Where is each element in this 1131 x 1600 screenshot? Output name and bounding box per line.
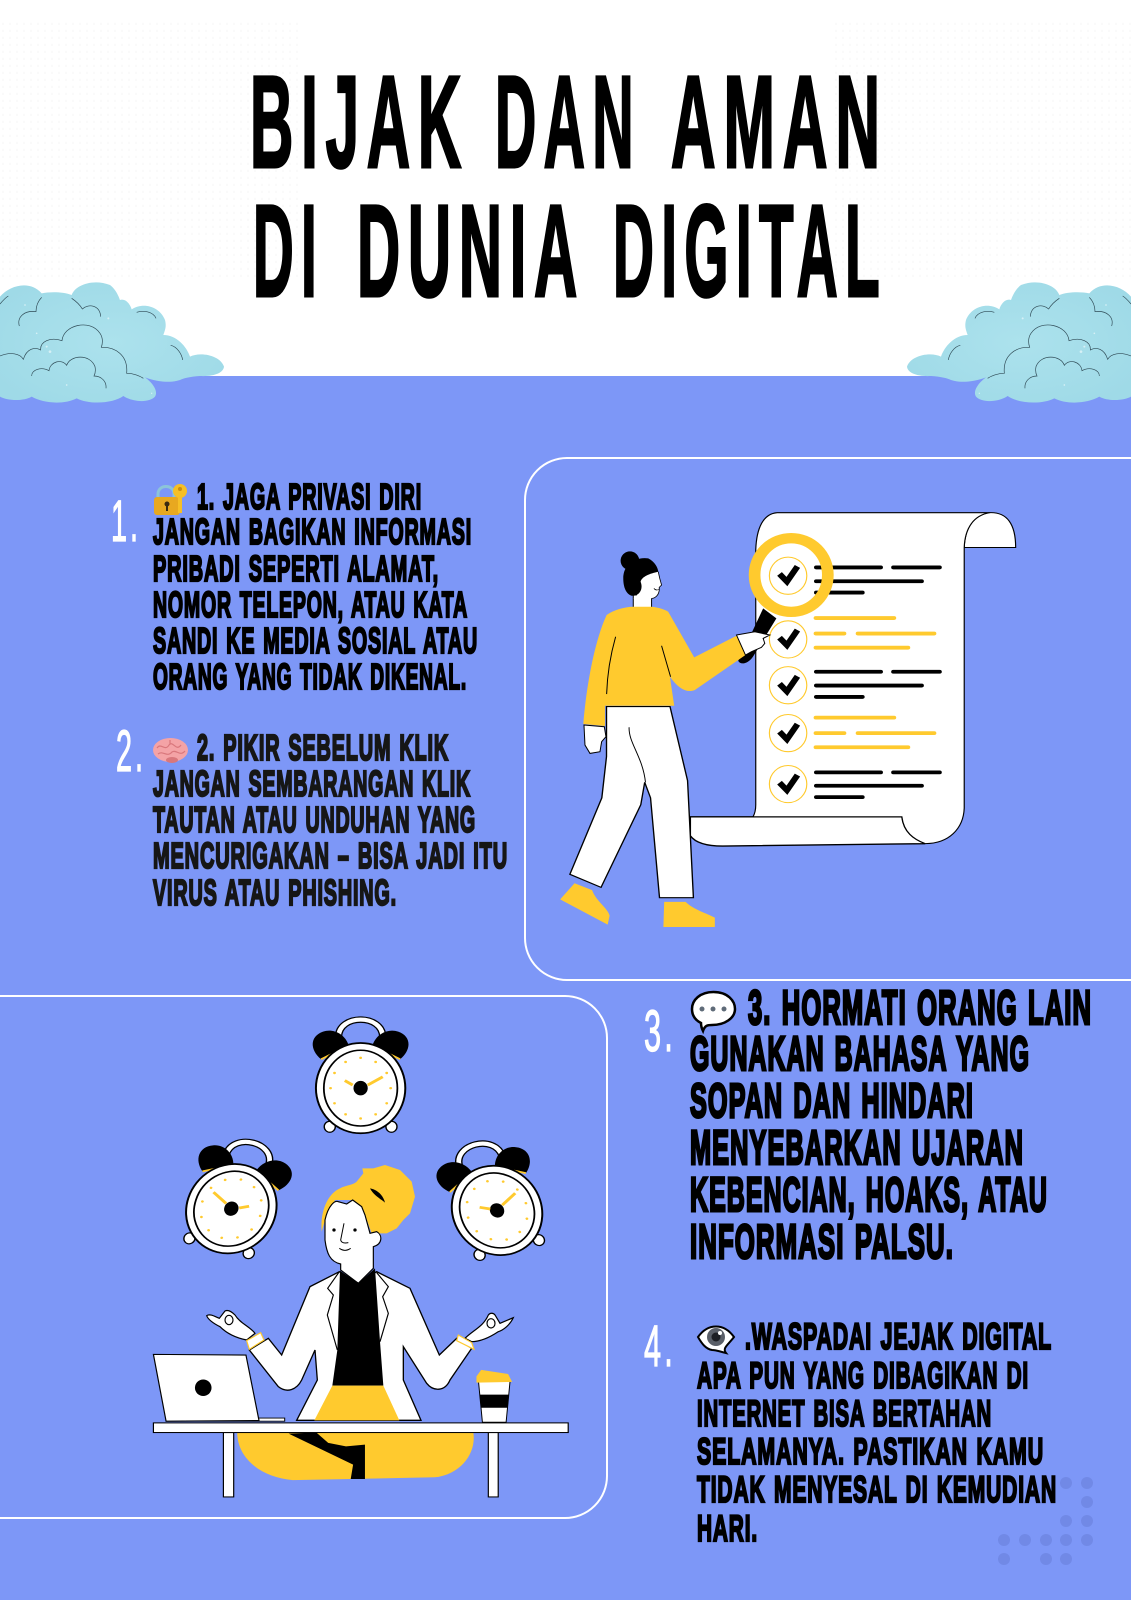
- text block: item 1: SANDI KE MEDIA SOSIAL ATAU: [153, 620, 478, 661]
- shirt: [332, 1268, 383, 1386]
- document scroll: [690, 513, 1016, 846]
- title: BIJAK: [250, 48, 469, 195]
- cloud right: [907, 282, 1131, 403]
- woman pants and shoes: [560, 707, 715, 927]
- text: 2.: [116, 719, 146, 784]
- clocks: [171, 1020, 557, 1265]
- text block: item 2: JANGAN SEMBARANGAN KLIK: [153, 763, 471, 804]
- woman upper body: [583, 551, 772, 754]
- text block: item 1: NOMOR TELEPON, ATAU KATA: [153, 584, 468, 625]
- icon: lock with key: [154, 484, 187, 515]
- hair: [321, 1165, 415, 1233]
- number 3: 3.: [644, 999, 676, 1064]
- text block: item 1: ORANG YANG TIDAK DIKENAL.: [153, 656, 467, 697]
- text block: item 2: MENCURIGAKAN – BISA JADI ITU: [153, 835, 508, 876]
- text block: item 2: TAUTAN ATAU UNDUHAN YANG: [153, 799, 476, 840]
- face: [325, 1200, 381, 1283]
- desk items: [152, 1354, 569, 1498]
- icon: brain: [153, 738, 188, 763]
- title: [250, 48, 888, 324]
- text: 1.: [111, 489, 141, 554]
- woman meditating upper body: [206, 1165, 514, 1421]
- text block: item 4: [697, 1316, 1057, 1549]
- text block: item 1: 1. JAGA PRIVASI DIRI: [197, 476, 422, 517]
- skirt: [314, 1386, 399, 1420]
- icon: speech bubble: [692, 992, 735, 1031]
- lapels: [327, 1272, 388, 1350]
- check circles: [769, 557, 807, 803]
- number 4: 4.: [644, 1314, 676, 1379]
- text block: item 3: [690, 982, 1092, 1269]
- text block: item 2: VIRUS ATAU PHISHING.: [153, 872, 397, 913]
- panel: meditation illustration frame: [0, 996, 607, 1518]
- text block: item 1: PRIBADI SEPERTI ALAMAT,: [153, 548, 439, 589]
- title: DUNIA: [357, 177, 585, 324]
- legs: [237, 1433, 474, 1480]
- text block: item 4: HARI.: [697, 1508, 758, 1549]
- title: DI: [253, 177, 324, 324]
- panel: checklist illustration frame: [525, 458, 1131, 980]
- icon: eye in speech bubble: [698, 1326, 734, 1353]
- illustration: woman meditating at desk with clocks: [168, 1010, 736, 1480]
- text block: item 2: [153, 727, 508, 913]
- decorative dots: [998, 1477, 1093, 1565]
- text: AMAN: [671, 48, 888, 195]
- coffee cup: [476, 1370, 512, 1422]
- table: [153, 1423, 568, 1497]
- text block: item 1: JANGAN BAGIKAN INFORMASI: [153, 511, 472, 552]
- hands: [207, 1310, 513, 1349]
- illustration: woman inspecting checklist: [560, 512, 1016, 927]
- text block: item 1: [153, 476, 478, 697]
- title: DAN: [495, 48, 641, 195]
- checklist text lines: [816, 567, 940, 797]
- text block: item 2: 2. PIKIR SEBELUM KLIK: [197, 727, 449, 768]
- magnifying glass: [738, 538, 828, 663]
- laptop: [153, 1354, 285, 1421]
- cloud left: [0, 282, 224, 403]
- jacket: [249, 1272, 472, 1420]
